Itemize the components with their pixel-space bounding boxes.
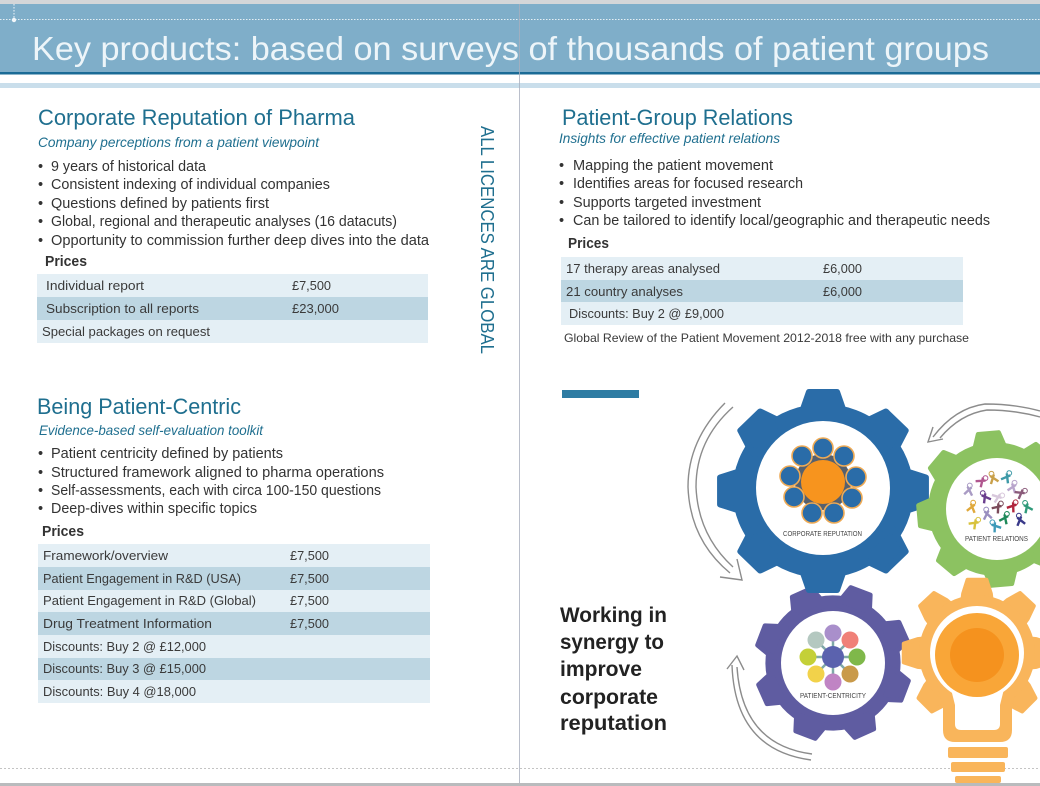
panel: Corporate Reputation of Pharma: Questions defined by patients first [51, 196, 269, 212]
panel: Patient-Group Relations: • [559, 176, 564, 192]
panel: Being Patient-Centric: • [38, 483, 43, 499]
accent bar [562, 390, 639, 398]
panel: Corporate Reputation of Pharma: Company perceptions from a patient viewpoint [38, 134, 320, 150]
panel: Patient-Group Relations: Supports targeted investment [573, 195, 761, 211]
panel: Being Patient-Centric: • [38, 501, 43, 517]
panel: Patient-Group Relations: Prices [568, 236, 609, 252]
panel: Corporate Reputation of Pharma: Individual report [46, 278, 144, 293]
panel: Being Patient-Centric: Patient centricity defined by patients [51, 446, 283, 462]
panel: Being Patient-Centric: • [38, 446, 43, 462]
gear: corporate reputation [720, 392, 926, 590]
text block: working in synergy [560, 604, 667, 735]
gear: patient-centricity [734, 564, 932, 762]
panel: Corporate Reputation of Pharma: • [38, 214, 43, 230]
panel: Being Patient-Centric: Patient Engagement in R&D (USA) [43, 571, 241, 586]
panel: Corporate Reputation of Pharma [37, 105, 430, 343]
panel: Corporate Reputation of Pharma: Special packages on request [42, 324, 210, 339]
panel: Being Patient-Centric: £7,500 [290, 571, 329, 586]
text block: working in synergy: Working in [560, 604, 667, 627]
panel: Being Patient-Centric: Discounts: Buy 2 @ £12,000 [43, 639, 206, 654]
panel: Being Patient-Centric: Discounts: Buy 3 @ £15,000 [43, 661, 206, 676]
panel: Patient-Group Relations: £6,000 [823, 284, 862, 299]
header banner: Key products: based on surveys of thousands of patient groups [32, 30, 989, 67]
panel: Being Patient-Centric: Discounts: Buy 4 @18,000 [43, 684, 196, 699]
panel: Being Patient-Centric: Drug Treatment Information [43, 616, 212, 631]
gear: patient relations: PATIENT RELATIONS [965, 534, 1028, 543]
panel: Being Patient-Centric: Deep-dives within specific topics [51, 501, 257, 517]
panel: Corporate Reputation of Pharma: Corporate Reputation of Pharma [38, 105, 356, 130]
panel: Patient-Group Relations: Mapping the patient movement [573, 158, 773, 174]
panel: Corporate Reputation of Pharma: Opportunity to commission further deep dives into the data [51, 233, 430, 249]
panel: Patient-Group Relations: Global Review of the Patient Movement 2012-2018 free with any purchase [564, 331, 969, 345]
panel: Being Patient-Centric: • [38, 465, 43, 481]
panel: Patient-Group Relations: • [559, 195, 564, 211]
text block: working in synergy: synergy to [560, 631, 664, 654]
panel: Patient-Group Relations: Insights for effective patient relations [559, 130, 780, 146]
gear: corporate reputation: CORPORATE REPUTATION [783, 529, 862, 538]
panel: Being Patient-Centric: £7,500 [290, 593, 329, 608]
panel: Being Patient-Centric: Self-assessments, each with circa 100-150 questions [51, 483, 381, 499]
panel: Patient-Group Relations: • [559, 213, 564, 229]
vertical note: all licences are global: ALL LICENCES ARE GLOBAL [477, 126, 497, 354]
panel: Being Patient-Centric: Being Patient-Centric [37, 394, 241, 419]
panel: Corporate Reputation of Pharma: £23,000 [292, 301, 339, 316]
icon: light bulb gear [904, 580, 1040, 783]
panel: Corporate Reputation of Pharma: • [38, 233, 43, 249]
panel: Being Patient-Centric: Prices [42, 524, 84, 540]
panel: Patient-Group Relations: Patient-Group Relations [562, 105, 793, 130]
panel: Corporate Reputation of Pharma: • [38, 177, 43, 193]
text block: working in synergy: improve [560, 658, 642, 681]
panel: Corporate Reputation of Pharma: • [38, 159, 43, 175]
panel: Patient-Group Relations: Discounts: Buy 2 @ £9,000 [569, 306, 724, 321]
panel: Corporate Reputation of Pharma: 9 years of historical data [51, 159, 207, 175]
gear: patient-centricity: PATIENT-CENTRICITY [800, 691, 866, 700]
panel: Being Patient-Centric: Structured framework aligned to pharma operations [51, 465, 384, 481]
gear: patient relations [913, 427, 1040, 591]
panel: Corporate Reputation of Pharma: • [38, 196, 43, 212]
panel: Patient-Group Relations [559, 105, 990, 345]
text block: working in synergy: reputation [560, 712, 667, 735]
arrow: left curved arrow [688, 403, 742, 580]
panel: Being Patient-Centric: £7,500 [290, 548, 329, 563]
panel: Corporate Reputation of Pharma: Subscription to all reports [46, 301, 200, 316]
panel: Patient-Group Relations: • [559, 158, 564, 174]
panel: Corporate Reputation of Pharma: Prices [45, 254, 87, 270]
panel: Patient-Group Relations: 17 therapy areas analysed [566, 261, 720, 276]
text block: working in synergy: corporate [560, 686, 658, 709]
arrow: bottom left curved arrow [727, 656, 812, 760]
panel: Patient-Group Relations: Identifies areas for focused research [573, 176, 803, 192]
panel: Being Patient-Centric: Patient Engagement in R&D (Global) [43, 593, 256, 608]
panel: Being Patient-Centric: Framework/overview [43, 548, 169, 563]
panel: Corporate Reputation of Pharma: Global, regional and therapeutic analyses (16 datacuts) [51, 214, 397, 230]
panel: Patient-Group Relations: Can be tailored to identify local/geographic and therapeutic needs [573, 213, 990, 229]
panel: Patient-Group Relations: £6,000 [823, 261, 862, 276]
panel: Corporate Reputation of Pharma: £7,500 [292, 278, 331, 293]
panel: Being Patient-Centric [37, 394, 430, 703]
panel: Being Patient-Centric: Evidence-based self-evaluation toolkit [39, 422, 264, 438]
panel: Being Patient-Centric: £7,500 [290, 616, 329, 631]
header banner [0, 4, 1040, 88]
panel: Corporate Reputation of Pharma: Consistent indexing of individual companies [51, 177, 330, 193]
panel: Patient-Group Relations: 21 country analyses [566, 284, 684, 299]
arrow: top right curved arrow [928, 404, 1040, 442]
